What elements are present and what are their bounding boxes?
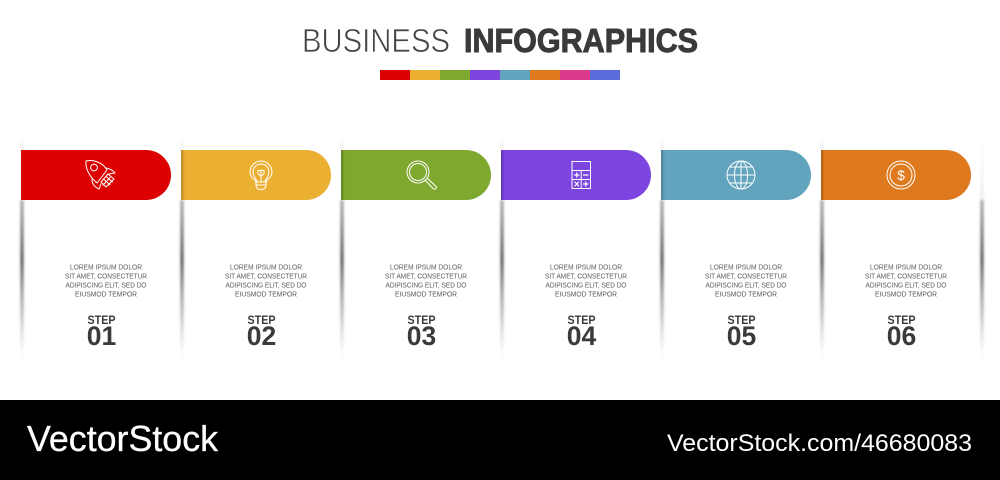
body text 1: ADIPISCING ELIT, SED DO [66,280,147,290]
banner 6 [821,150,971,200]
step 2: 02 [247,321,276,351]
step 3: STEP [408,315,436,327]
body text 4: SIT AMET, CONSECTETUR [545,272,627,280]
body text 5: LOREM IPSUM DOLOR [710,262,782,272]
body text 5: EIUSMOD TEMPOR [715,290,777,298]
step 1: 01 [87,321,116,351]
body text 6: EIUSMOD TEMPOR [875,290,937,298]
icon: coin: $ [897,167,905,183]
footer url: VectorStock.com/46680083 [667,430,972,457]
body text 5: SIT AMET, CONSECTETUR [705,272,787,280]
step 5: STEP [728,315,756,327]
right edge shadow [980,136,984,358]
step 4: STEP [568,315,596,327]
step 1: STEP [88,315,116,327]
card 3 [340,136,491,358]
banner 2 [181,150,331,200]
banner 4 [501,150,651,200]
body text 5 [705,262,787,298]
body text 6: LOREM IPSUM DOLOR [870,262,942,272]
body text 4 [545,262,627,298]
icon: magnifier [407,161,436,189]
body text 2: SIT AMET, CONSECTETUR [225,272,307,280]
step 6: STEP [888,315,916,327]
card 2 [180,136,331,358]
body text 2: LOREM IPSUM DOLOR [230,262,302,272]
body text 2 [225,262,307,298]
footer bar [0,400,1000,480]
body text 2: EIUSMOD TEMPOR [235,290,297,298]
body text 3: SIT AMET, CONSECTETUR [385,272,467,280]
icon: coin [887,161,915,189]
banner 3 [341,150,491,200]
title: INFOGRAPHICS [464,22,698,59]
body text 1 [65,262,147,298]
body text 3: LOREM IPSUM DOLOR [390,262,462,272]
card 1 [20,136,171,358]
icon: calculator [572,162,590,188]
body text 5: ADIPISCING ELIT, SED DO [706,280,787,290]
step 6: 06 [887,321,916,351]
body text 6 [865,262,947,298]
colour bar [380,70,620,80]
title: BUSINESS [302,22,450,59]
footer logo: VectorStock [27,418,219,459]
body text 4: ADIPISCING ELIT, SED DO [546,280,627,290]
body text 6: ADIPISCING ELIT, SED DO [866,280,947,290]
icon: rocket [86,160,115,189]
banner 5 [661,150,811,200]
body text 1: SIT AMET, CONSECTETUR [65,272,147,280]
body text 4: LOREM IPSUM DOLOR [550,262,622,272]
body text 3 [385,262,467,298]
body text 4: EIUSMOD TEMPOR [555,290,617,298]
body text 3: ADIPISCING ELIT, SED DO [386,280,467,290]
icon: globe [727,161,755,189]
icon: light bulb [250,161,272,190]
card 4 [500,136,651,358]
step 4: 04 [567,321,596,351]
step 2: STEP [248,315,276,327]
step 5: 05 [727,321,756,351]
body text 6: SIT AMET, CONSECTETUR [865,272,947,280]
banner 1 [21,150,171,200]
body text 1: LOREM IPSUM DOLOR [70,262,142,272]
card 5 [660,136,811,358]
card 6 [820,136,971,358]
body text 1: EIUSMOD TEMPOR [75,290,137,298]
body text 3: EIUSMOD TEMPOR [395,290,457,298]
step 3: 03 [407,321,436,351]
title [302,22,698,59]
body text 2: ADIPISCING ELIT, SED DO [226,280,307,290]
